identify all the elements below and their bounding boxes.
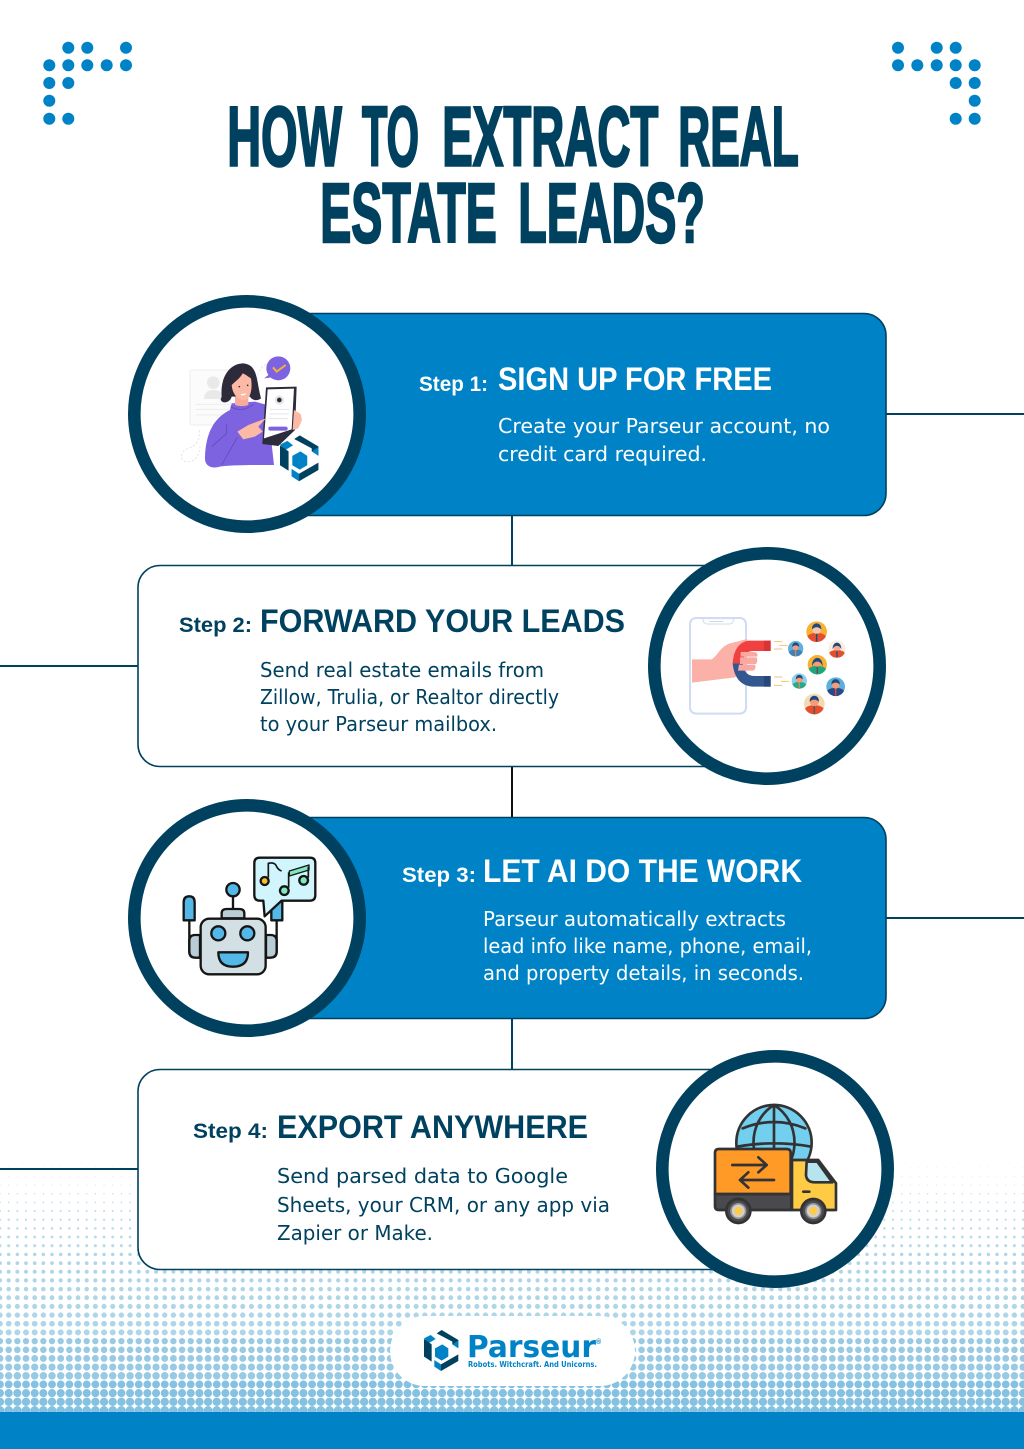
step 4 card (138, 1070, 778, 1270)
panel: step 4 (138, 1056, 888, 1282)
step 1 card (240, 314, 886, 516)
step 3 description (483, 907, 812, 985)
panel: step 1 (134, 301, 886, 527)
step 2 description: Send real estate emails from (260, 658, 544, 682)
title (227, 89, 799, 260)
step 2 label: Step 2: (179, 614, 252, 637)
logo mark (424, 1330, 458, 1371)
decorative dots: top left (43, 42, 132, 125)
logo wordmark: Parseur (467, 1330, 596, 1365)
logo pill (390, 1316, 635, 1386)
step 4 heading: EXPORT ANYWHERE (277, 1109, 588, 1145)
icon: woman with tablet and parseur logo (181, 356, 318, 481)
step 4 description: Send parsed data to Google (277, 1164, 568, 1188)
step 3 heading: LET AI DO THE WORK (483, 853, 802, 889)
footer logo (390, 1316, 635, 1386)
step 3 label: Step 3: (402, 864, 476, 887)
step 3 description: and property details, in seconds. (483, 961, 804, 985)
step 3 card (240, 818, 886, 1018)
step 3 description: Parseur automatically extracts (483, 907, 786, 931)
step 2 heading: FORWARD YOUR LEADS (260, 603, 625, 639)
panel: step 3 (134, 805, 886, 1031)
icon: magnet attracting leads from phone (690, 618, 846, 714)
step 2 description (260, 658, 559, 736)
step 2 description: Zillow, Trulia, or Realtor directly (260, 685, 559, 709)
panel: step 2 (138, 553, 880, 779)
step 1 heading: SIGN UP FOR FREE (498, 361, 772, 397)
registered mark: ® (596, 1338, 602, 1346)
step 4 description (277, 1164, 610, 1245)
step 1 label: Step 1: (419, 373, 488, 396)
step 1 description (498, 414, 830, 466)
step 2 circle (654, 553, 880, 779)
title: REAL (678, 89, 799, 183)
footer bar (0, 1412, 1024, 1449)
step 4 label: Step 4: (193, 1120, 268, 1143)
step 4 description: Sheets, your CRM, or any app via (277, 1193, 610, 1217)
step 4 description: Zapier or Make. (277, 1221, 433, 1245)
connector lines (0, 414, 1024, 1169)
step 1 circle (134, 301, 360, 527)
step 2 description: to your Parseur mailbox. (260, 712, 497, 736)
icon: delivery truck with globe (715, 1105, 836, 1223)
step 1 description: Create your Parseur account, no (498, 414, 830, 438)
logo tagline: Robots. Witchcraft. And Unicorns. (468, 1360, 597, 1369)
title: EXTRACT (442, 89, 658, 183)
title: HOW (227, 89, 342, 183)
step 3 description: lead info like name, phone, email, (483, 934, 812, 958)
title: ESTATE (320, 166, 497, 260)
step 3 circle (134, 805, 360, 1031)
title: TO (362, 89, 419, 183)
step 2 card (138, 566, 778, 766)
decorative dots: top right (892, 42, 981, 125)
step 4 circle (662, 1056, 888, 1282)
title: LEADS? (518, 166, 705, 260)
step 1 description: credit card required. (498, 442, 707, 466)
icon: robot with music speech bubble (184, 858, 315, 974)
